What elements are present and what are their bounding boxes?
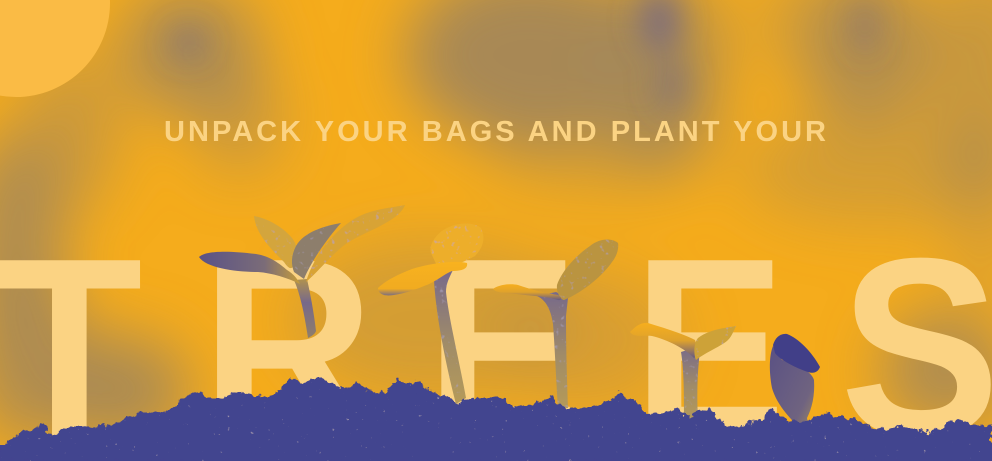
right leaf xyxy=(306,205,405,282)
right leaf xyxy=(557,240,618,300)
seed sprout xyxy=(770,334,820,436)
sprout 2 xyxy=(378,224,483,404)
heading: unpack your bags and plant your: UNPACK YOUR BAGS AND PLANT YOUR xyxy=(164,116,826,148)
stem xyxy=(294,279,316,338)
seed cap xyxy=(773,334,820,373)
sprout 1 xyxy=(199,205,405,338)
dark left leaf xyxy=(199,252,300,284)
lower leaf xyxy=(378,262,467,295)
sprout 3 xyxy=(493,240,618,408)
stem xyxy=(434,270,466,404)
title: TREES xyxy=(0,206,992,461)
seed body xyxy=(770,346,814,436)
upper leaf xyxy=(430,224,483,268)
back leaf xyxy=(254,216,297,268)
stem xyxy=(681,346,700,420)
decorative circle xyxy=(0,0,110,97)
middle leaf xyxy=(292,223,341,279)
left leaf xyxy=(630,323,697,358)
left leaf xyxy=(493,284,561,300)
sprout 4 xyxy=(630,323,736,420)
stem xyxy=(537,292,568,408)
soil xyxy=(0,378,992,461)
right leaf xyxy=(694,326,736,360)
